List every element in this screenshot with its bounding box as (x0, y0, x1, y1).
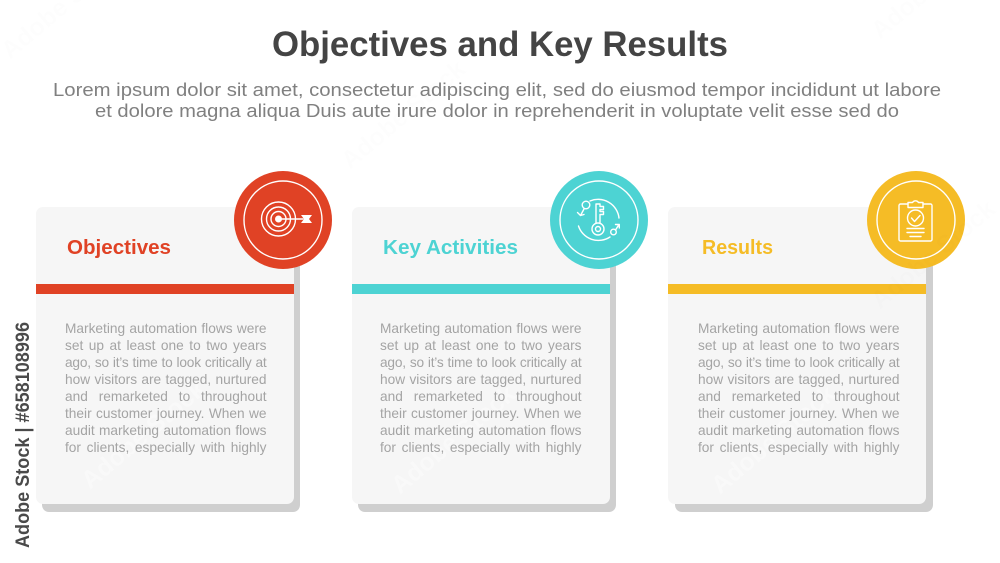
body text: their customer journey. When we (380, 406, 582, 421)
card shadow (675, 214, 933, 512)
body text: for clients, especially with highly (65, 440, 266, 455)
body text: ago, so it’s time to look critically at (380, 355, 582, 370)
accent bar (668, 284, 926, 294)
body text: and remarketed to throughout (380, 389, 582, 404)
watermark on card: Adobe Stock (76, 375, 211, 495)
body text: for clients, especially with highly (380, 440, 582, 455)
accent bar (36, 284, 294, 294)
panel: key activities (352, 171, 648, 512)
watermark pattern on background (0, 0, 1000, 315)
body text: set up at least one to two years (65, 338, 266, 353)
body text: ago, so it’s time to look critically at (698, 355, 900, 370)
body text: ago, so it’s time to look critically at (65, 355, 266, 370)
watermark pattern on background: Adobe Stock (336, 55, 471, 175)
card shadow (42, 214, 300, 512)
body text (380, 320, 582, 460)
icon: key with cycle arrows (550, 171, 648, 269)
heading: key activities: Key Activities (383, 237, 518, 259)
body text: set up at least one to two years (698, 338, 900, 353)
body text: for clients, especially with highly (698, 440, 900, 455)
body text: and remarketed to throughout (65, 389, 266, 404)
panel: results (668, 171, 965, 512)
title: Objectives and Key Results (272, 25, 728, 64)
subtitle text: et dolore magna aliqua Duis aute irure dolor in reprehenderit in voluptate velit esse sed do (95, 100, 899, 121)
body text (698, 320, 900, 460)
watermark pattern on background: Adobe Stock (866, 195, 1000, 315)
accent bar (352, 284, 610, 294)
body text: set up at least one to two years (380, 338, 582, 353)
body text: how visitors are tagged, nurtured (380, 372, 582, 387)
body text (65, 320, 267, 460)
card shadow (358, 214, 616, 512)
card body (668, 207, 926, 504)
panel: objectives (36, 171, 332, 512)
card body (352, 207, 610, 504)
icon: clipboard with check (867, 171, 965, 269)
body text: audit marketing automation flows (380, 423, 582, 438)
heading: results: Results (702, 237, 773, 259)
body text: their customer journey. When we (65, 406, 266, 421)
subtitle text: Lorem ipsum dolor sit amet, consectetur adipiscing elit, sed do eiusmod tempor incididunt ut labore (53, 79, 941, 100)
body text: Marketing automation flows were (380, 321, 582, 336)
subtitle text (53, 79, 941, 121)
body text: Marketing automation flows were (698, 321, 900, 336)
heading: objectives: Objectives (67, 237, 171, 259)
body text: audit marketing automation flows (698, 423, 900, 438)
body text: how visitors are tagged, nurtured (698, 372, 900, 387)
body text: and remarketed to throughout (698, 389, 900, 404)
watermark: adobe stock id: Adobe Stock | #658108996 (13, 322, 34, 548)
body text: Marketing automation flows were (65, 321, 266, 336)
card body (36, 207, 294, 504)
body text: how visitors are tagged, nurtured (65, 372, 266, 387)
icon: target with arrow (234, 171, 332, 269)
body text: audit marketing automation flows (65, 423, 266, 438)
watermark on card: Adobe Stock (386, 380, 521, 500)
body text: their customer journey. When we (698, 406, 900, 421)
watermark on card: Adobe Stock (706, 380, 841, 500)
